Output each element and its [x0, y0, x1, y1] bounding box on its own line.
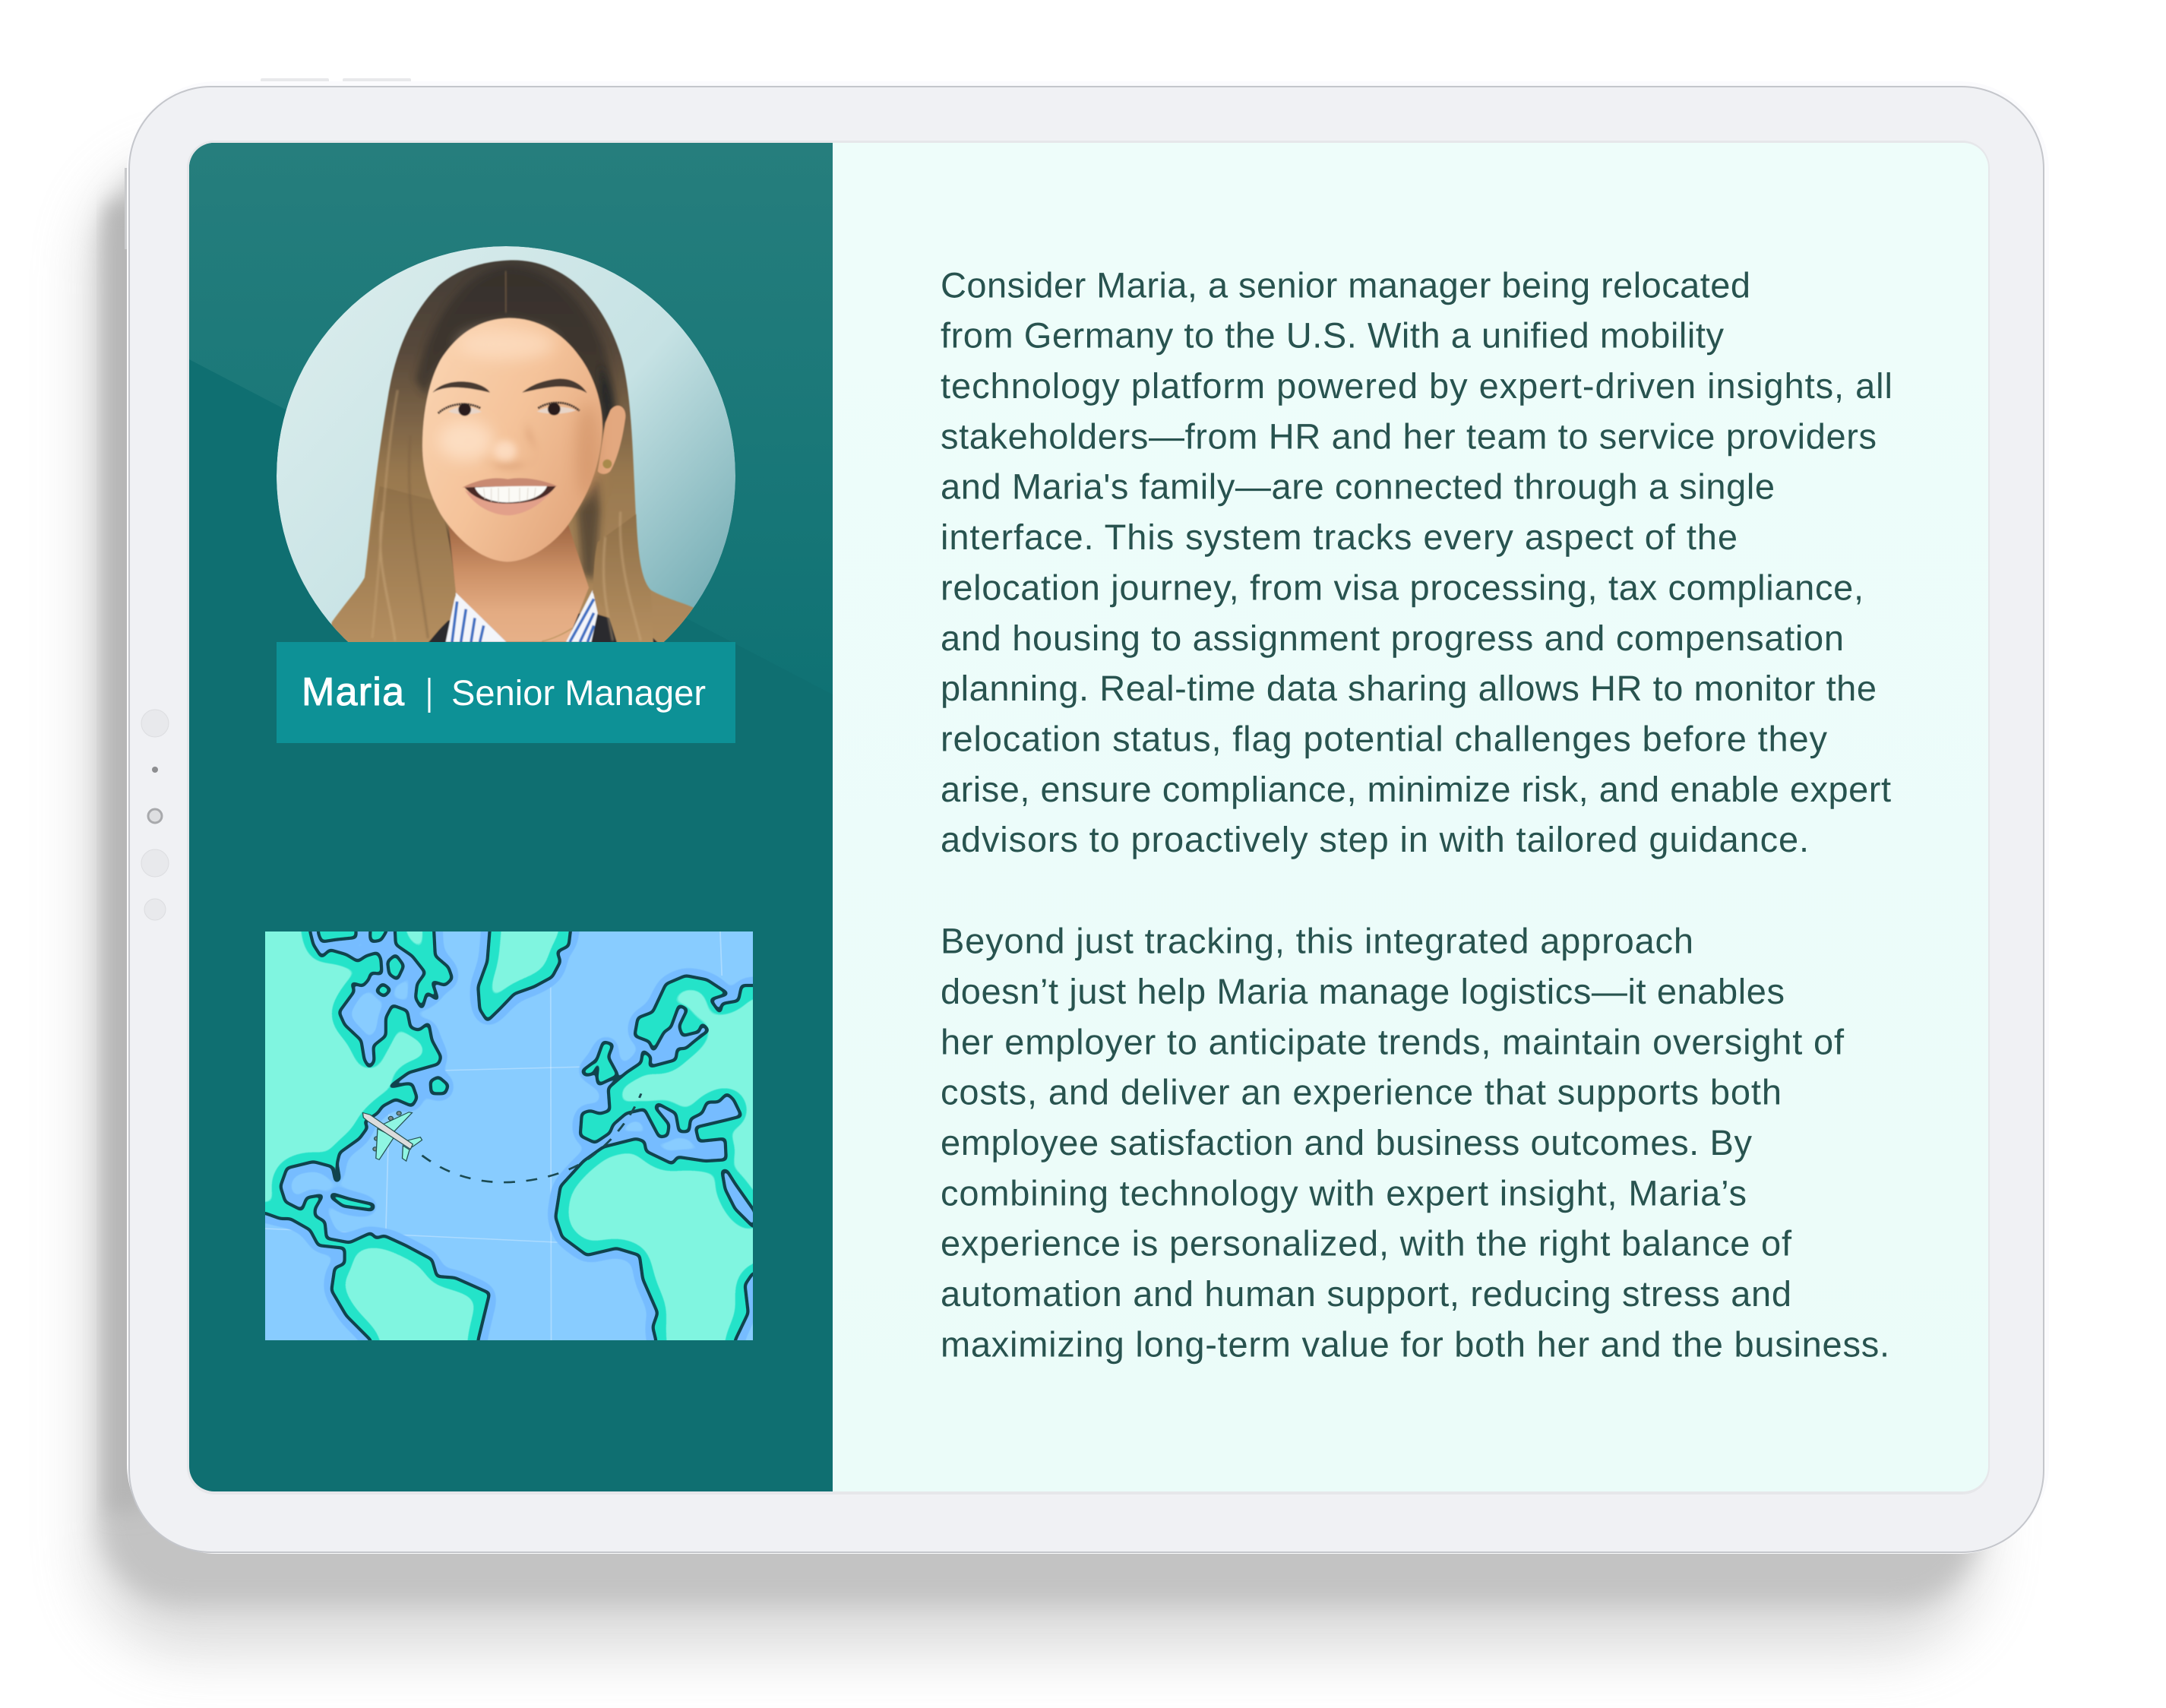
land masses [218, 891, 778, 1369]
device drop shadow [90, 163, 1981, 1653]
ear [598, 406, 625, 474]
paragraph one: Consider Maria, a senior manager being relocated [941, 264, 1750, 305]
hair part [505, 271, 507, 313]
paragraph one: arise, ensure compliance, minimize risk, and enable expert [941, 769, 1891, 809]
face [422, 318, 602, 561]
paragraph one: advisors to proactively step in with tailored guidance. [941, 819, 1809, 859]
hair strands [372, 390, 640, 640]
face highlight and shading [438, 420, 494, 461]
teeth [475, 486, 547, 502]
hair [365, 260, 694, 642]
paragraph two [941, 921, 1889, 1364]
divider [428, 678, 430, 713]
paragraph two: experience is personalized, with the right balance of [941, 1223, 1792, 1264]
map grid [265, 931, 722, 1340]
paragraph two: Beyond just tracking, this integrated approach [941, 921, 1693, 961]
relocation map [218, 891, 778, 1369]
paragraph one: and Maria's family—are connected through a single [941, 467, 1775, 507]
paragraph one: planning. Real-time data sharing allows HR to monitor the [941, 668, 1877, 708]
paragraph one: relocation status, flag potential challenges before they [941, 719, 1828, 758]
paragraph one: relocation journey, from visa processing, tax compliance, [941, 567, 1864, 607]
paragraph two: costs, and deliver an experience that supports both [941, 1072, 1782, 1112]
flight path [422, 1093, 641, 1182]
portrait photo of Maria [277, 246, 735, 642]
paragraph one: stakeholders—from HR and her team to service providers [941, 416, 1877, 456]
tablet device frame [125, 78, 2049, 1554]
panel: right text background [833, 143, 1988, 1491]
paragraph two: her employer to anticipate trends, maintain oversight of [941, 1021, 1845, 1061]
nose [484, 420, 537, 469]
panel: left teal background [189, 143, 833, 1491]
mouth [462, 478, 558, 488]
shirt collar stripes [446, 590, 598, 642]
name label [277, 642, 735, 743]
role: Senior Manager [451, 672, 706, 713]
paragraph two: employee satisfaction and business outcomes. By [941, 1122, 1752, 1162]
name: Maria [302, 670, 404, 714]
paragraph one: and housing to assignment progress and compensation [941, 618, 1844, 658]
eyes [448, 406, 482, 414]
paragraph two: automation and human support, reducing stress and [941, 1273, 1791, 1314]
front hair locks [329, 486, 456, 648]
paragraph one: interface. This system tracks every aspect of the [941, 517, 1738, 557]
earring [602, 460, 612, 469]
paragraph two: maximizing long-term value for both her and the business. [941, 1324, 1889, 1364]
eyebrows [432, 381, 490, 393]
airplane [362, 1112, 422, 1161]
shirt and blazer [425, 613, 659, 644]
dark hair shadow near face [416, 266, 615, 435]
front sensors and camera [141, 710, 169, 920]
paragraph one [941, 264, 1892, 859]
screen [189, 143, 1988, 1491]
paragraph one: technology platform powered by expert-driven insights, all [941, 365, 1892, 406]
neck [448, 522, 589, 642]
paragraph one: from Germany to the U.S. With a unified mobility [941, 315, 1725, 356]
paragraph two: combining technology with expert insight, Maria’s [941, 1172, 1747, 1213]
necklace [542, 628, 572, 641]
paragraph two: doesn’t just help Maria manage logistics—it enables [941, 971, 1785, 1011]
